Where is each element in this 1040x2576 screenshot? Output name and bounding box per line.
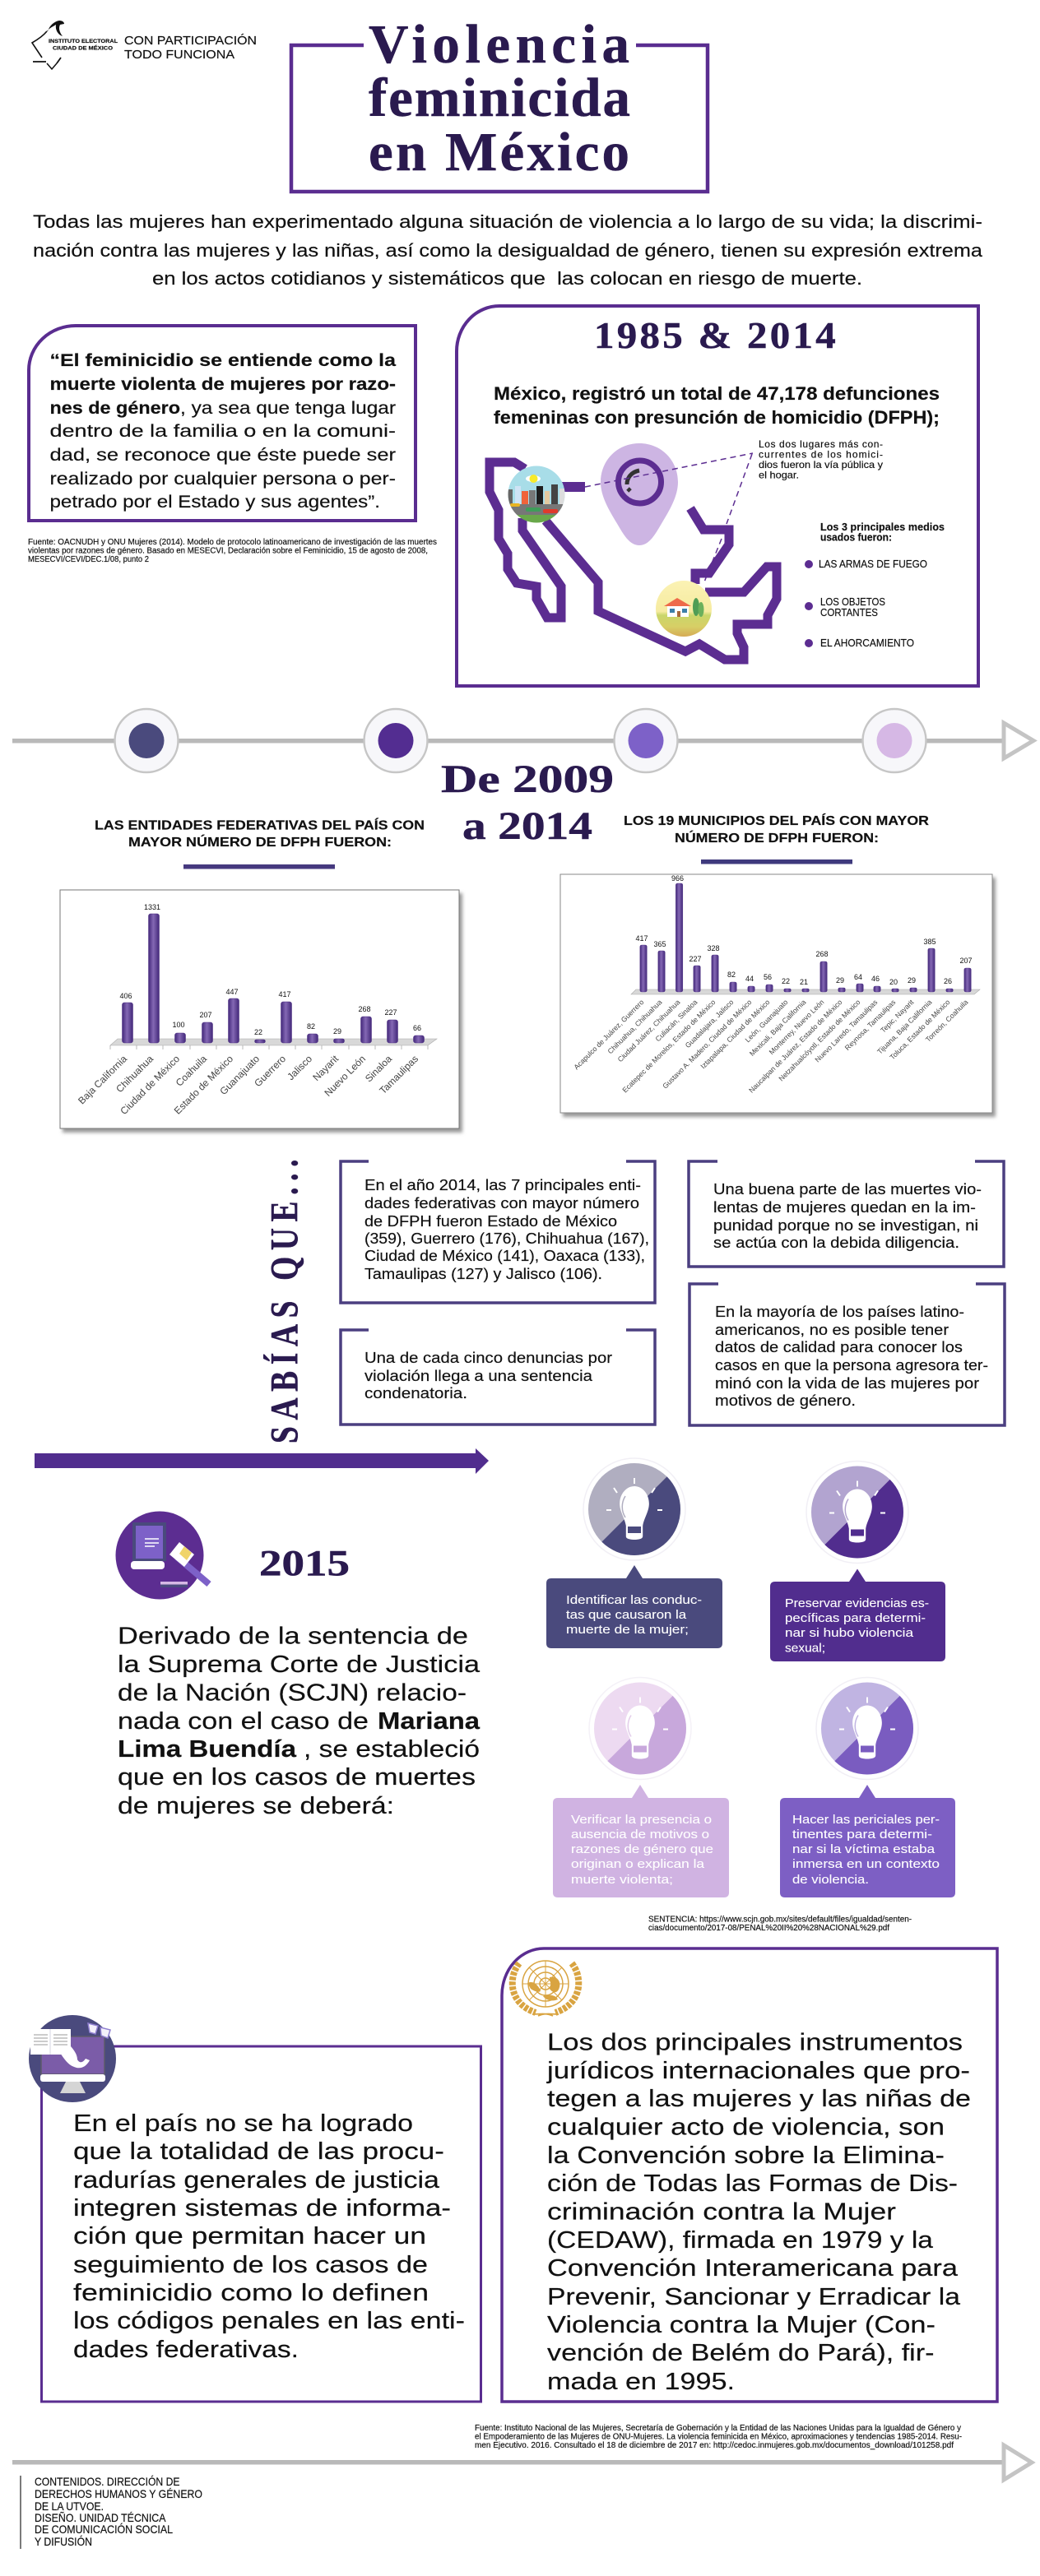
panel: 1985 & 2014 — [457, 306, 978, 686]
bar values — [635, 874, 973, 986]
text: SCJN ruling: la Suprema Corte de Justicia — [118, 1652, 480, 1678]
axis labels: Guanajuato — [217, 1053, 262, 1097]
timeline dot 1 — [115, 709, 178, 772]
callout: identify conduct: tas que causaron la — [566, 1608, 687, 1622]
text: instruments: mada en 1995. — [547, 2369, 735, 2395]
panel: fact impunity: lentas de mujeres quedan en la im- — [713, 1198, 976, 1216]
bar values: 417 — [635, 934, 648, 943]
text: procuradurías: feminicidio como lo definen — [73, 2280, 429, 2306]
panel: fact impunity: punidad porque no se investigan, ni — [713, 1216, 978, 1234]
callout: preserve evidence: nar si hubo violencia — [785, 1626, 914, 1640]
title: en México — [369, 122, 629, 183]
panel: fact states 2014 — [341, 1161, 655, 1303]
text: instruments: ción de Todas las Formas de Dis- — [547, 2171, 958, 2197]
credits: DISEÑO. UNIDAD TÉCNICA — [35, 2511, 166, 2524]
source note: sentencia: cias/documento/2017-08/PENAL%20II%20%28NACIONAL%29.pdf — [648, 1924, 889, 1933]
quote text: “El feminicidio se entiende como la — [49, 350, 397, 370]
axis labels: Tamaulipas — [377, 1053, 420, 1096]
axis labels: Sinaloa — [363, 1053, 394, 1084]
panel: fact data quality: motivos de género. — [715, 1392, 856, 1409]
text: instruments: Los dos principales instrumentos — [547, 2030, 963, 2056]
heading: municipios: NÚMERO DE DFPH FUERON: — [675, 831, 879, 846]
bar values: 46 — [871, 975, 880, 983]
heading: municipios — [624, 814, 929, 864]
text: instruments: Violencia contra la Mujer (Con- — [547, 2312, 936, 2338]
callout: expert reports: inmersa en un contexto — [792, 1857, 940, 1871]
panel: international instruments — [502, 1948, 997, 2402]
text: SCJN ruling: Derivado de la sentencia de — [118, 1624, 468, 1650]
icon: logo figure — [32, 21, 64, 69]
panel: fact impunity: se actúa con la debida diligencia. — [713, 1234, 959, 1251]
bottom timeline arrow — [12, 2445, 1032, 2480]
callout: expert reports: tinentes para determi- — [792, 1828, 932, 1842]
title: feminicida — [369, 67, 630, 128]
heading: entidades federativas: MAYOR NÚMERO DE DFPH FUERON: — [128, 835, 392, 850]
logo: Instituto Electoral: CIUDAD DE MÉXICO — [53, 44, 113, 51]
text: procuradurías — [73, 2110, 465, 2363]
credits: DE LA UTVOE. — [35, 2500, 104, 2513]
panel: fact data quality: En la mayoría de los países latino- — [715, 1303, 964, 1320]
bar values: 227 — [384, 1008, 397, 1017]
source note: sentencia: SENTENCIA: https://www.scjn.gob.mx/sites/default/files/igualdad/senten- — [648, 1915, 912, 1925]
panel: fact impunity: Una buena parte de las muertes vio- — [713, 1180, 982, 1198]
callout: preserve evidence: sexual; — [785, 1642, 825, 1655]
source note: quote — [28, 538, 437, 564]
bar chart: entidades — [60, 890, 462, 1133]
icon: monitor with documents — [29, 2015, 116, 2102]
text: total deaths — [494, 383, 940, 428]
quote text: dad, se reconoce que éste puede ser — [49, 445, 396, 465]
logo slogan: CON PARTICIPACIÓN — [124, 34, 257, 48]
panel: fact data quality: casos en que la persona agresora ter- — [715, 1356, 988, 1374]
intro text: en los actos cotidianos y sistemáticos que las colocan en riesgo de muerte. — [152, 268, 862, 289]
text: instruments: cualquier acto de violencia, son — [547, 2114, 945, 2140]
icon: book and gavel — [115, 1512, 209, 1599]
icon: city circle — [508, 466, 565, 523]
text: instruments: Prevenir, Sancionar y Erradicar la — [547, 2284, 960, 2310]
timeline dot 3 — [614, 709, 678, 772]
text: SCJN ruling: nada con el caso de — [118, 1708, 369, 1735]
legend: three main means: LAS ARMAS DE FUEGO — [819, 558, 927, 570]
intro text: Todas las mujeres han experimentado alguna situación de violencia a lo largo de su vida; la discrimi- — [33, 211, 982, 232]
dashed leader lines — [585, 453, 753, 584]
source note: report: Fuente: Instituto Nacional de las Mujeres, Secretaría de Gobernación y la Entidad de las Naciones Unidas para la Igualdad de Género y — [475, 2423, 962, 2433]
legend: three main means: usados fueron: — [820, 531, 892, 543]
heading: Sabías que: SABÍAS QUE... — [263, 1159, 307, 1443]
callout: preserve evidence — [770, 1569, 945, 1661]
legend: three main means: CORTANTES — [820, 607, 878, 619]
text: SCJN ruling: que en los casos de muertes — [118, 1764, 476, 1791]
heading: 1985 & 2014: 1985 & 2014 — [594, 315, 838, 356]
bar values: 966 — [671, 874, 684, 883]
text: SCJN ruling: Lima Buendía — [118, 1736, 297, 1763]
axis labels: Toluca, Estado de México — [888, 998, 952, 1061]
bar values: 22 — [782, 977, 790, 985]
credits: DERECHOS HUMANOS Y GÉNERO — [35, 2487, 202, 2500]
logo: Instituto Electoral — [32, 21, 257, 69]
axis labels: Ciudad Juárez, Chihuahua — [616, 998, 682, 1063]
logo slogan — [124, 34, 257, 62]
icon: house circle — [656, 581, 712, 637]
callout: verify motives: originan o explican la — [571, 1857, 705, 1871]
bar values: 227 — [689, 955, 702, 963]
axis labels: Acapulco de Juárez, Guerrero — [572, 998, 646, 1071]
panel: fact data quality: datos de calidad para conocer los — [715, 1338, 963, 1355]
bars — [640, 883, 971, 992]
panel: fact sentencing: condenatoria. — [364, 1384, 467, 1402]
axis labels: Ciudad de México — [118, 1053, 182, 1117]
text: SCJN ruling: Mariana — [378, 1708, 481, 1735]
source note: report: men Ejecutivo. 2016. Consultado el 18 de diciembre de 2017 en: http://cedoc.inmujeres.gob.mx/documentos_download/101258.pdf — [475, 2440, 954, 2450]
axis labels: Gustavo A. Madero, Ciudad de México — [661, 998, 754, 1091]
panel: fact states 2014: (359), Guerrero (176), Chihuahua (167), — [364, 1230, 649, 1247]
heading: De 2009 a 2014 — [441, 758, 614, 848]
callout: expert reports: nar si la víctima estaba — [792, 1842, 936, 1856]
axis labels: Nuevo León — [322, 1053, 368, 1099]
axis labels: Tijuana, Baja California — [875, 998, 934, 1056]
callout: preserve evidence: Preservar evidencias es- — [785, 1596, 929, 1610]
text: places: el hogar. — [759, 469, 799, 480]
bar values: 447 — [225, 988, 239, 996]
panel: fact states 2014: Ciudad de México (141), Oaxaca (133), — [364, 1247, 645, 1264]
source note: sentencia — [648, 1915, 912, 1933]
quote text: muerte violenta de mujeres por razo- — [49, 374, 396, 394]
panel: fact states 2014: de DFPH fueron Estado de México — [364, 1212, 617, 1230]
axis labels: Reynosa, Tamaulipas — [843, 998, 898, 1052]
axis labels: Culiacán, Sinaloa — [654, 998, 699, 1043]
text: total deaths: México, registró un total de 47,178 defunciones — [494, 383, 940, 404]
axis labels: Baja California — [76, 1053, 129, 1106]
legend: three main means: LOS OBJETOS — [820, 596, 885, 608]
panel: fact states 2014: Tamaulipas (127) y Jalisco (106). — [364, 1265, 602, 1282]
timeline dot 2 — [364, 709, 428, 772]
callout: expert reports: Hacer las periciales per- — [792, 1813, 940, 1827]
timeline dot 4 — [862, 709, 926, 772]
text: instruments: la Convención sobre la Elimina- — [547, 2143, 945, 2169]
panel: fact impunity — [689, 1161, 1004, 1267]
bar values: 20 — [889, 978, 898, 986]
callout: preserve evidence: pecíficas para determi- — [785, 1611, 926, 1625]
axis labels — [76, 1053, 420, 1117]
text: places: currentes de los homici- — [759, 449, 883, 461]
axis labels: Netzahualcóyotl, Estado de México — [777, 998, 862, 1082]
source note: quote: Fuente: OACNUDH y ONU Mujeres (2014). Modelo de protocolo latinoamericano de investigación de las muertes — [28, 538, 437, 547]
bar values: 66 — [413, 1024, 421, 1032]
callout: identify conduct: muerte de la mujer; — [566, 1623, 689, 1637]
credits — [21, 2475, 202, 2549]
axis labels: Mexicali, Baja California — [748, 998, 808, 1058]
heading: De 2009 a 2014: De 2009 — [441, 758, 614, 801]
quote text: , ya sea que tenga lugar — [180, 398, 396, 418]
legend: three main means — [805, 521, 945, 649]
text: instruments: tegen a las mujeres y las niñas de — [547, 2086, 971, 2112]
icon: map pin — [601, 443, 678, 545]
text: instruments: Convención Interamericana para — [547, 2255, 958, 2282]
source note: report — [475, 2423, 962, 2450]
quote text: petrado por el Estado y sus agentes”. — [49, 492, 380, 512]
axis labels: Ecatepec de Morelos, Estado de México — [620, 998, 717, 1094]
bar values: 1331 — [144, 903, 160, 911]
text: procuradurías: seguimiento de los casos de — [73, 2252, 428, 2278]
legend: three main means: Los 3 principales medios — [820, 521, 945, 533]
text: procuradurías: dades federativas. — [73, 2337, 299, 2363]
callout: verify motives: ausencia de motivos o — [571, 1828, 709, 1842]
panel: fact sentencing: Una de cada cinco denuncias por — [364, 1349, 612, 1366]
panel: definition quote — [29, 326, 416, 521]
bar values: 21 — [800, 978, 808, 986]
bar values: 44 — [745, 975, 754, 983]
icon: UN emblem — [513, 1961, 578, 2016]
bar values: 365 — [653, 940, 666, 948]
callout: identify conduct: Identificar las conduc- — [566, 1593, 702, 1607]
axis labels: Guerrero — [252, 1053, 288, 1089]
icon: lightbulb 2 — [806, 1461, 908, 1563]
source note: quote: MESECVI/CEVI/DEC.1/08, punto 2 — [28, 555, 149, 564]
quote text: realizado por cualquier persona o per- — [49, 469, 396, 489]
bar values: 268 — [815, 950, 829, 958]
axis labels: Monterrey, Nuevo León — [768, 998, 826, 1056]
text: places: dios fueron la vía pública y — [759, 459, 883, 470]
text: places: Los dos lugares más con- — [759, 438, 883, 450]
legend: three main means: EL AHORCAMIENTO — [820, 637, 914, 649]
axis labels: Coahuila — [174, 1053, 209, 1089]
axis labels — [572, 998, 970, 1095]
bar values: 56 — [764, 973, 772, 981]
panel: fact data quality — [689, 1284, 1005, 1425]
axis labels: Jalisco — [285, 1053, 314, 1082]
text: procuradurías: que la totalidad de las procu- — [73, 2138, 444, 2165]
icon: lightbulb 1 — [583, 1458, 685, 1560]
bar chart: municipios — [560, 874, 996, 1117]
bar values: 29 — [333, 1027, 341, 1035]
quote text — [49, 350, 397, 512]
bar values: 385 — [923, 938, 936, 946]
bar values: 207 — [199, 1011, 212, 1019]
bar values: 22 — [254, 1028, 262, 1036]
bar values: 417 — [278, 990, 291, 998]
panel: fact sentencing — [341, 1330, 655, 1425]
credits: Y DIFUSIÓN — [35, 2535, 92, 2548]
source note: quote: violentas por razones de género. Basado en MESECVI, Declaración sobre el Feminicidio, 15 de agosto de 2008, — [28, 546, 428, 556]
axis labels: Estado de México — [172, 1053, 235, 1117]
axis labels: León, Guanajuato — [743, 998, 790, 1044]
title — [369, 14, 630, 183]
callout: expert reports: de violencia. — [792, 1873, 869, 1887]
text: places — [759, 438, 883, 480]
credits: CONTENIDOS. DIRECCIÓN DE — [35, 2475, 179, 2488]
bar values: 26 — [944, 977, 952, 985]
map of Mexico — [490, 462, 777, 660]
text: SCJN ruling: de la Nación (SCJN) relacio- — [118, 1679, 467, 1706]
axis labels: Chihuahua, Chihuahua — [606, 998, 664, 1055]
quote text: nes de género — [49, 398, 180, 418]
heading: 2015: 2015 — [259, 1543, 350, 1583]
bars — [122, 914, 425, 1043]
bar values: 29 — [908, 976, 916, 985]
text: procuradurías: integren sistemas de informa- — [73, 2195, 451, 2222]
text: instruments — [546, 2030, 971, 2395]
logo: Instituto Electoral: INSTITUTO ELECTORAL — [49, 39, 118, 44]
panel: fact data quality: minó con la vida de las mujeres por — [715, 1374, 979, 1392]
icon: lightbulb 3 — [589, 1678, 691, 1780]
callout: verify motives — [553, 1785, 729, 1897]
intro text: nación contra las mujeres y las niñas, así como la desigualdad de género, tienen su expresión extrema — [33, 240, 983, 261]
heading: municipios: LOS 19 MUNICIPIOS DEL PAÍS CON MAYOR — [624, 814, 929, 828]
axis labels: Torreón, Coahuila — [924, 998, 970, 1044]
icon: lightbulb 4 — [816, 1678, 918, 1780]
callout: identify conduct — [546, 1565, 722, 1648]
text: SCJN ruling: , se estableció — [304, 1736, 480, 1763]
bar values: 328 — [707, 944, 720, 952]
callout: verify motives: Verificar la presencia o — [571, 1813, 712, 1827]
bar values: 207 — [959, 957, 973, 965]
source note: report: el Empoderamiento de las Mujeres de ONU-Mujeres. La violencia feminicida en México, aproximaciones y tendencias 1985-2014. Resu- — [475, 2431, 962, 2441]
panel: fact states 2014: dades federativas con mayor número — [364, 1194, 639, 1212]
panel: procuradurías — [29, 2015, 481, 2402]
bar values: 100 — [172, 1021, 185, 1029]
axis labels: Nayarit — [310, 1053, 341, 1083]
axis labels: Guadalajara, Jalisco — [684, 998, 736, 1049]
bar values: 82 — [307, 1022, 315, 1031]
heading: entidades federativas — [95, 819, 425, 869]
axis labels: Tepic, Nayarit — [879, 998, 916, 1035]
text: SCJN ruling: de mujeres se deberá: — [118, 1793, 394, 1819]
logo slogan: TODO FUNCIONA — [124, 48, 234, 62]
bar values: 64 — [854, 973, 862, 981]
callout: verify motives: razones de género que — [571, 1842, 713, 1856]
text: SCJN ruling — [118, 1624, 481, 1819]
heading: De 2009 a 2014: a 2014 — [462, 804, 592, 848]
panel: fact states 2014: En el año 2014, las 7 principales enti- — [364, 1176, 641, 1193]
intro text — [33, 211, 983, 289]
credits: DE COMUNICACIÓN SOCIAL — [35, 2523, 173, 2536]
text: procuradurías: En el país no se ha logrado — [73, 2110, 413, 2137]
axis labels: Nuevo Laredo, Tamaulipas — [813, 998, 880, 1063]
bar values: 406 — [119, 992, 132, 1000]
text: procuradurías: radurías generales de justicia — [73, 2167, 439, 2194]
axis labels: Chihuahua — [114, 1053, 156, 1095]
arrow: section divider — [35, 1448, 489, 1474]
heading: entidades federativas: LAS ENTIDADES FEDERATIVAS DEL PAÍS CON — [95, 819, 425, 832]
text: instruments: (CEDAW), firmada en 1979 y la — [547, 2227, 933, 2254]
bar values — [119, 903, 421, 1036]
title: Violencia — [369, 14, 629, 75]
panel: fact sentencing: violación llega a una sentencia — [364, 1367, 593, 1384]
title panel — [291, 14, 708, 192]
callout: expert reports — [780, 1785, 955, 1897]
text: instruments: vención de Belém do Pará), fir- — [547, 2340, 935, 2366]
axis labels: Naucalpan de Juárez, Estado de México — [747, 998, 844, 1095]
bar values: 29 — [836, 976, 844, 985]
text: total deaths: femeninas con presunción de homicidio (DFPH); — [494, 407, 940, 428]
text: procuradurías: los códigos penales en las enti- — [73, 2308, 465, 2334]
axis labels: Iztapalapa, Ciudad de México — [699, 998, 772, 1070]
text: instruments: criminación contra la Mujer — [547, 2199, 897, 2226]
bar values: 268 — [358, 1005, 371, 1013]
text: instruments: jurídicos internacionales que pro- — [546, 2058, 970, 2084]
quote text: dentro de la familia o en la comuni- — [49, 421, 396, 441]
text: procuradurías: ción que permitan hacer un — [73, 2223, 426, 2249]
panel: fact data quality: americanos, no es posible tener — [715, 1321, 949, 1338]
timeline arrow — [12, 709, 1033, 772]
bar values: 82 — [727, 971, 736, 979]
callout: verify motives: muerte violenta; — [571, 1873, 673, 1887]
